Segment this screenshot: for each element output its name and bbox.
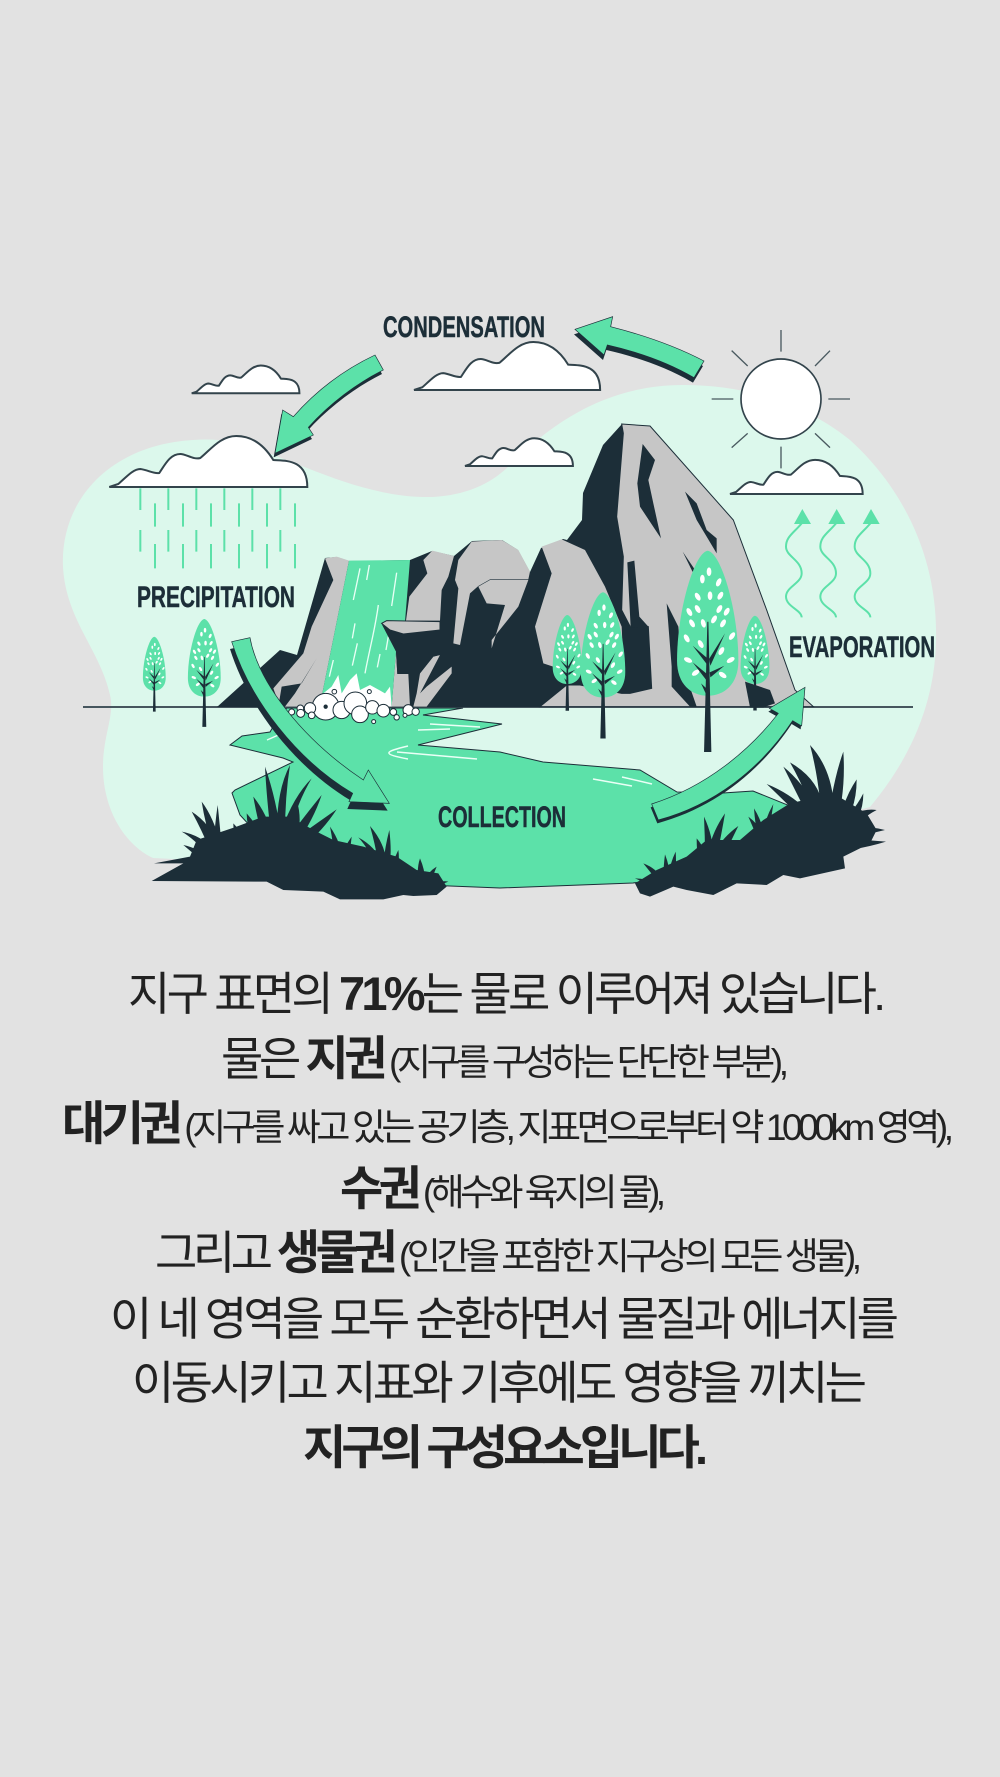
dark rock silhouette (217, 424, 813, 707)
cloud: small upper left (192, 366, 299, 393)
horizon line (83, 706, 913, 708)
label: evaporation: EVAPORATION (789, 631, 935, 664)
wavy arrow 1 (786, 509, 811, 617)
cloud: small centre (465, 438, 573, 466)
trees (143, 551, 769, 752)
cloud: under sun (730, 460, 863, 494)
illustration: water cycle (63, 311, 936, 899)
sun disc (741, 359, 821, 439)
label: collection: COLLECTION (438, 801, 566, 834)
line 1: 지구 표면의 71%는 물로 이루어져 있습니다. (128, 967, 886, 1020)
tree 4 (581, 592, 625, 738)
line 2: 물은 지권 (지구를 구성하는 단단한 부분), (221, 1032, 789, 1085)
line 7: 이동시키고 지표와 기후에도 영향을 끼치는 (132, 1357, 867, 1409)
sun rays (712, 330, 850, 468)
river and lake (230, 708, 800, 888)
arrow: precipitation to collection (230, 638, 389, 811)
foam and boulders (289, 689, 419, 724)
sun (712, 330, 850, 468)
tree 5 (677, 551, 738, 752)
evaporation arrows (786, 509, 880, 617)
rain lines (140, 488, 295, 568)
grass left (152, 765, 448, 899)
arrow: evaporation to condensation (574, 317, 704, 383)
body text (62, 967, 954, 1474)
wavy arrow 3 (855, 509, 880, 617)
line 5: 그리고 생물권 (인간을 포함한 지구상의 모든 생물), (155, 1226, 862, 1279)
arrow: collection to evaporation (651, 687, 805, 823)
rain cloud (109, 436, 307, 487)
grass right (635, 745, 886, 897)
waterfall (322, 560, 440, 707)
waterfall cliffs (273, 540, 530, 707)
line 6: 이 네 영역을 모두 순환하면서 물질과 에너지를 (110, 1293, 899, 1345)
wavy arrow 2 (820, 509, 845, 617)
tree 2 (188, 619, 221, 727)
main peak (535, 424, 813, 707)
label: precipitation: PRECIPITATION (137, 581, 295, 614)
line 4: 수권 (해수와 육지의 물), (340, 1162, 666, 1215)
line 8: 지구의 구성요소입니다. (303, 1421, 708, 1474)
mountains (217, 424, 813, 707)
tree 6 (741, 616, 769, 711)
water highlights (267, 724, 652, 786)
arrow: condensation to precipitation (274, 355, 383, 457)
cloud: centre top (414, 342, 600, 390)
line 3: 대기권 (지구를 싸고 있는 공기층, 지표면으로부터 약 1000km 영역), (62, 1097, 954, 1150)
label: condensation: CONDENSATION (383, 311, 545, 344)
tree 1 (143, 637, 166, 712)
mint background blob (63, 385, 936, 880)
tree 3 (553, 615, 582, 711)
